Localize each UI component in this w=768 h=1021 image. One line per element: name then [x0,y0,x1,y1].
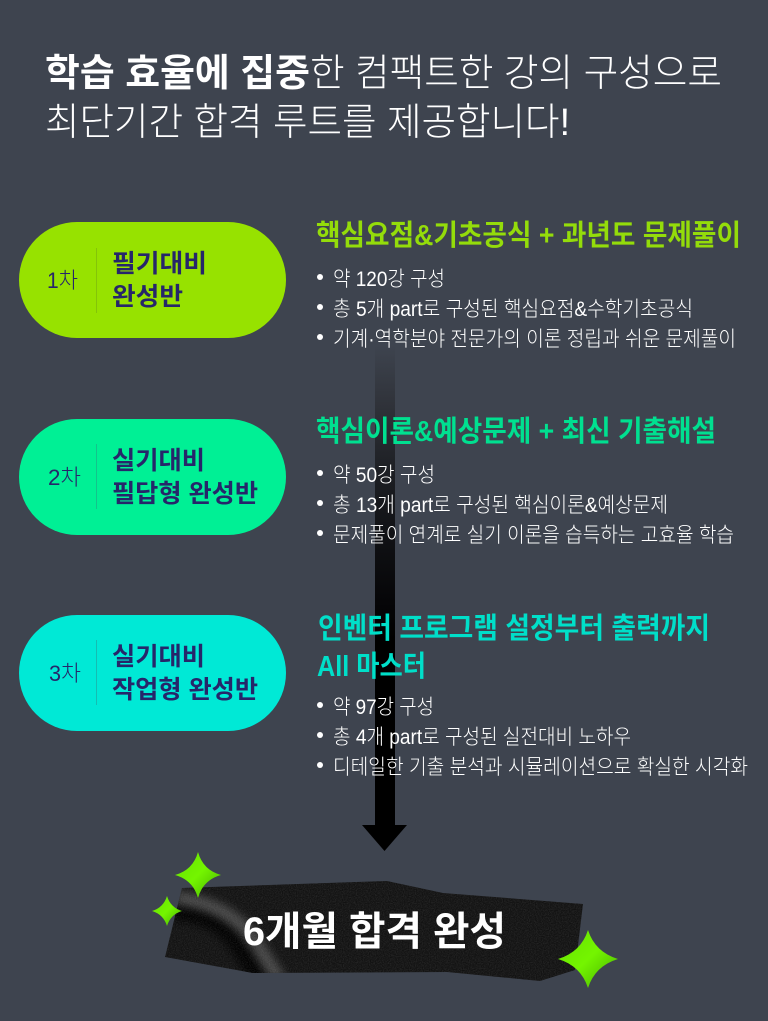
text block: 3rd stage details: 약 97강 구성 [333,696,434,719]
text block: 1st stage details: 총 5개 part로 구성된 핵심요점&수학기초공식 [333,298,693,321]
text block: 3rd stage details: 총 4개 part로 구성된 실전대비 노하우 [333,726,631,749]
title: 학습 효율에 집중 [45,53,310,95]
panel: 3rd stage pill [19,615,286,731]
panel: 1st stage pill [19,222,286,338]
icon: sparkle top [175,852,221,898]
text block: 1st stage details [316,219,741,351]
panel: 1st stage pill: 1차 [47,268,78,293]
text block: 3rd stage details: 인벤터 프로그램 설정부터 출력까지 [318,612,710,645]
text block: 3rd stage details: All 마스터 [317,650,426,683]
panel: 2nd stage pill: 필답형 완성반 [112,480,258,508]
arrow: vertical route to goal [362,345,407,851]
callout: black tape banner [165,881,583,981]
icon: sparkle left [152,896,182,926]
title [45,53,722,144]
panel: 2nd stage pill: 2차 [48,465,81,490]
title: 최단기간 합격 루트를 제공합니다! [45,102,570,144]
panel: 3rd stage pill: 3차 [49,661,81,686]
panel: 3rd stage pill: 실기대비 [112,643,205,671]
text block: 2nd stage details: 총 13개 part로 구성된 핵심이론&예상문제 [333,494,668,517]
panel: 2nd stage pill: 실기대비 [112,447,205,475]
text block: 2nd stage details [316,415,734,547]
text block: 1st stage details: 약 120강 구성 [333,268,445,291]
text block: 2nd stage details: 약 50강 구성 [333,464,435,487]
text block: 2nd stage details: 핵심이론&예상문제 + 최신 기출해설 [316,415,716,448]
text block: 3rd stage details [317,612,748,779]
text block: 1st stage details: 핵심요점&기초공식 + 과년도 문제풀이 [316,219,741,252]
panel: 2nd stage pill [19,419,286,535]
icon: sparkle right [558,930,618,988]
text block: 1st stage details: 기계·역학분야 전문가의 이론 정립과 쉬운 문제풀이 [333,328,736,351]
title: 한 컴팩트한 강의 구성으로 [310,53,722,95]
panel: 3rd stage pill: 작업형 완성반 [112,676,258,704]
panel: 1st stage pill: 필기대비 [112,250,207,278]
panel: 1st stage pill: 완성반 [112,283,183,311]
callout: black tape banner: 6개월 합격 완성 [243,910,506,954]
text block: 2nd stage details: 문제풀이 연계로 실기 이론을 습득하는 고효율 학습 [333,524,734,547]
